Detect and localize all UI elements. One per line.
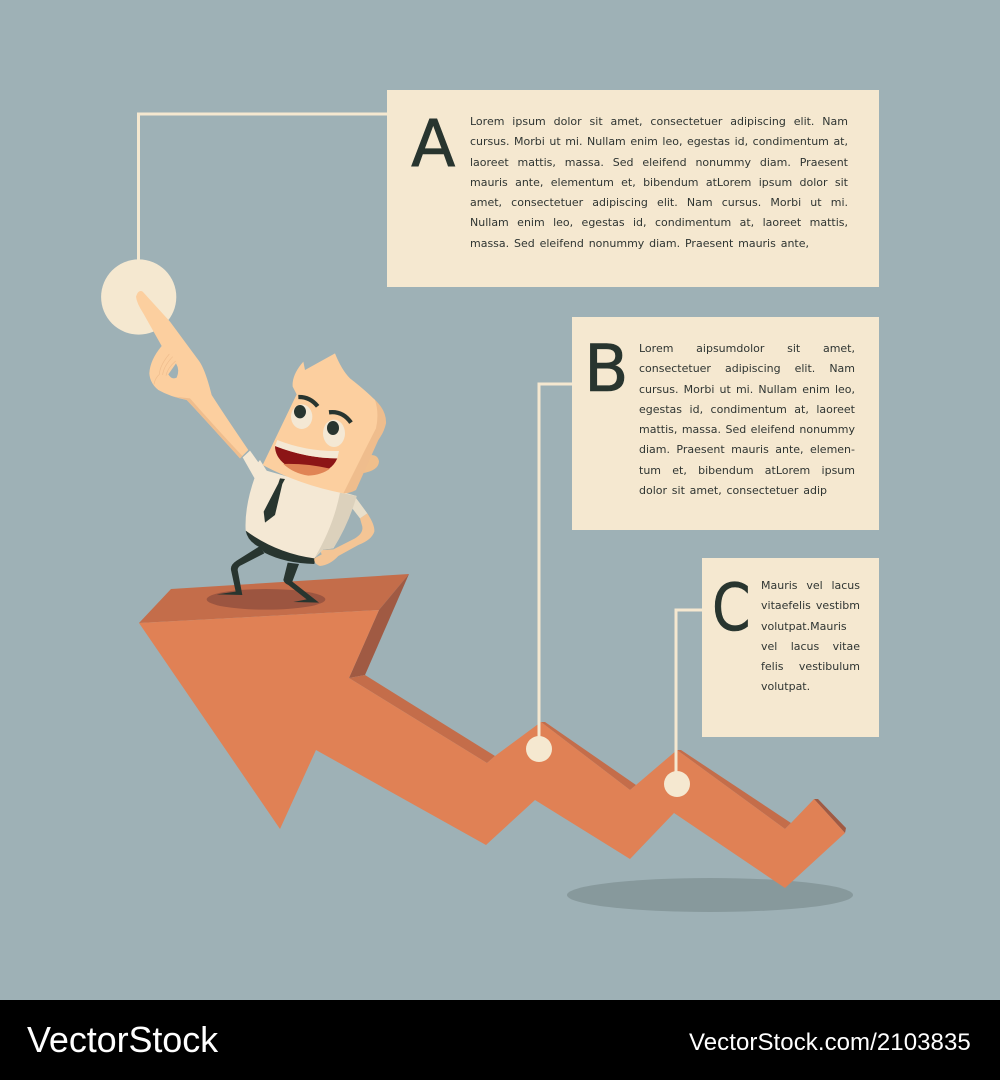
text A: Lorem ipsum dolor sit amet, consectetuer adipiscing elit. Nam [470,115,848,128]
letter A: A [411,107,455,182]
text B: cursus. Morbi ut mi. Nullam enim leo, [639,383,855,396]
letter C: C [712,571,751,646]
arrow [139,574,846,888]
text C: vitaefelis vestibm [761,599,860,612]
eyebrows [298,397,351,423]
head [263,353,386,493]
panel B [572,317,879,530]
businessman character [136,291,386,610]
letter B: B [584,332,629,407]
text A: Nullam enim leo, egestas id, condimentum at, laoreet mattis, [470,216,848,229]
watermark logo: VectorStock [27,1019,218,1060]
text A: cursus. Morbi ut mi. Nullam enim leo, egestas id, condimentum at, [470,135,848,148]
panel A [387,90,879,287]
text B: egestas id, condimentum at, laoreet [639,403,855,416]
text A: laoreet mattis, massa. Sed eleifend nonummy diam. Praesent [470,156,848,169]
mouth [275,440,339,476]
tie [264,478,285,523]
text B: consectetuer adipiscing elit. Nam [639,362,855,375]
connector and button A [101,114,387,335]
text C: volutpat. [761,680,810,693]
text A: massa. Sed eleifend nonummy diam. Praesent mauris ante, [470,237,809,250]
foot shadow [207,589,325,610]
left sleeve [252,460,268,483]
text C: vel lacus vitae [761,640,860,653]
text B: mattis, massa. Sed eleifend nonummy [639,423,855,436]
text C: Mauris vel lacus [761,579,860,592]
text B: dolor sit amet, consectetuer adip [639,484,827,497]
head shade [343,398,386,493]
footer watermark bar [0,1000,1000,1080]
text A [470,115,848,250]
connector and dot C [664,610,702,797]
text B [639,342,855,497]
eyes [291,404,345,447]
shirt shade [314,493,357,558]
face [263,353,377,493]
right sleeve [348,497,367,518]
ear [362,455,379,473]
panel C [702,558,879,737]
ground shadow [567,878,853,912]
text B: tum et, bibendum atLorem ipsum [639,464,855,477]
text C [761,579,860,693]
watermark url: VectorStock.com/2103835 [689,1029,971,1056]
lower body [207,460,374,610]
right arm [314,513,374,566]
text B: diam. Praesent mauris ante, elemen- [639,443,855,456]
pointing arm and hand [136,291,265,485]
connector and dot B [526,384,572,762]
left sleeve [243,451,265,485]
text C: volutpat.Mauris [761,620,847,633]
text A: amet, consectetuer adipiscing elit. Nam cursus. Morbi ut mi. [470,196,848,209]
text C: felis vestibulum [761,660,860,673]
legs and trousers [217,531,319,603]
text A: mauris ante, elementum et, bibendum atLorem ipsum dolor sit [470,176,848,189]
text B: Lorem aipsumdolor sit amet, [639,342,855,355]
shirt [246,468,357,558]
